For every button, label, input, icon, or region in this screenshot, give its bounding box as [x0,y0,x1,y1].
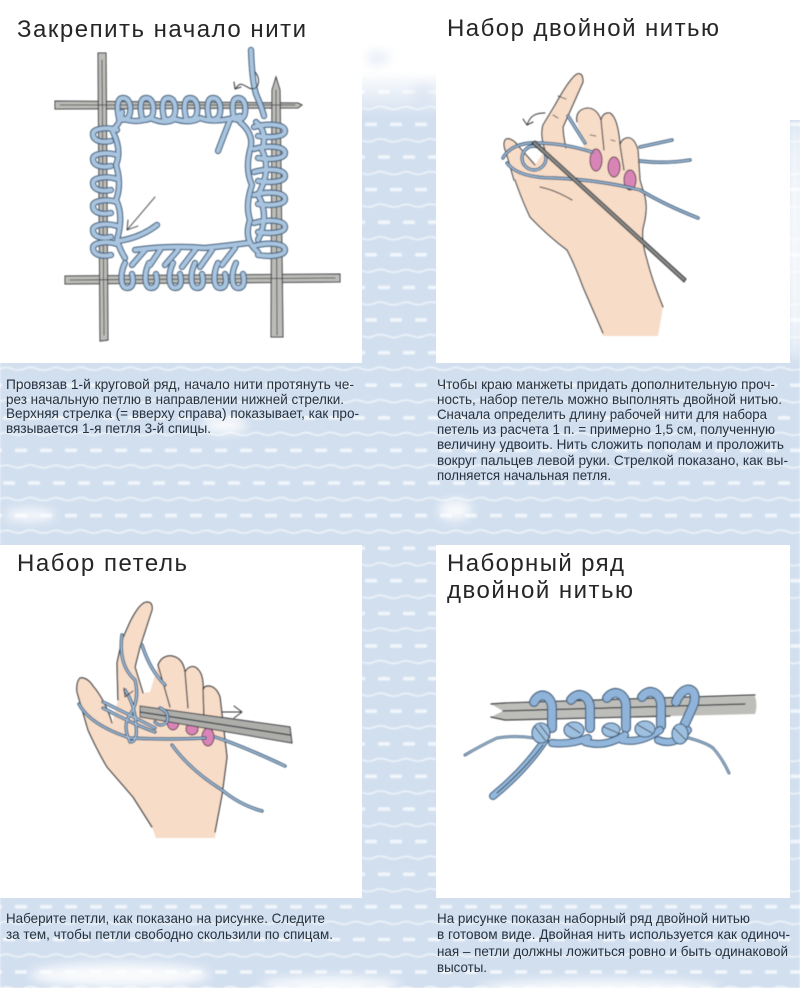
panel: casting on stitches [0,545,362,898]
panel: double thread cast-on [436,0,800,363]
text: stitches instructions: Наберите петли, как показано на рисунке. Следите [6,910,325,926]
panel: fix thread start [0,0,362,363]
heading: Набор двойной нитью [447,15,719,42]
text: double thread instructions: вокруг пальцев левой руки. Стрелкой показано, как вы- [437,452,788,468]
text: double thread instructions: величину удвоить. Нить сложить пополам и проложить [437,436,784,452]
text: finished row instructions: высоты. [437,959,487,975]
text: thread start instructions [6,376,359,436]
text: double thread instructions [437,376,788,483]
text: finished row instructions [437,910,790,975]
heading [447,550,633,604]
text: finished row instructions: На рисунке показан наборный ряд двойной нитью [437,910,750,926]
text: finished row instructions: в готовом виде. Двойная нить используется как одиноч- [437,926,790,942]
text: double thread instructions: полняется начальная петля. [437,467,611,483]
text: thread start instructions: Провязав 1-й круговой ряд, начало нити протянуть че- [6,376,354,392]
heading: Набор петель [17,550,187,577]
text: stitches instructions: за тем, чтобы петли свободно скользили по спицам. [6,926,333,942]
heading: двойной нитью [447,577,633,604]
text: double thread instructions: петель из расчета 1 п. = примерно 1,5 см, полученную [437,421,775,437]
text: stitches instructions [6,910,333,942]
text: double thread instructions: ность, набор петель можно выполнять двойной нитью. [437,391,782,407]
text: thread start instructions: вязывается 1-я петля 3-й спицы. [6,420,211,436]
panel: finished double thread row [436,545,790,898]
text: finished row instructions: ная – петли должны ложиться ровно и быть одинаковой [437,943,788,959]
illustration: hand with double thread and needle [503,74,698,336]
text: thread start instructions: рез начальную петлю в направлении нижней стрелки. [6,391,344,407]
illustration: four needles with yarn square [55,50,340,341]
illustration: hand holding needles with yarn [77,602,292,838]
text: thread start instructions: Верхняя стрелка (= вверху справа) показывает, как про- [6,405,359,421]
text: double thread instructions: Чтобы краю манжеты придать дополнительную проч- [437,376,775,392]
heading: Закрепить начало нити [17,16,306,43]
heading: Наборный ряд [447,550,624,577]
illustration: cast-on row on two needles [465,690,756,796]
text: double thread instructions: Сначала определить длину рабочей нити для набора [437,406,767,422]
